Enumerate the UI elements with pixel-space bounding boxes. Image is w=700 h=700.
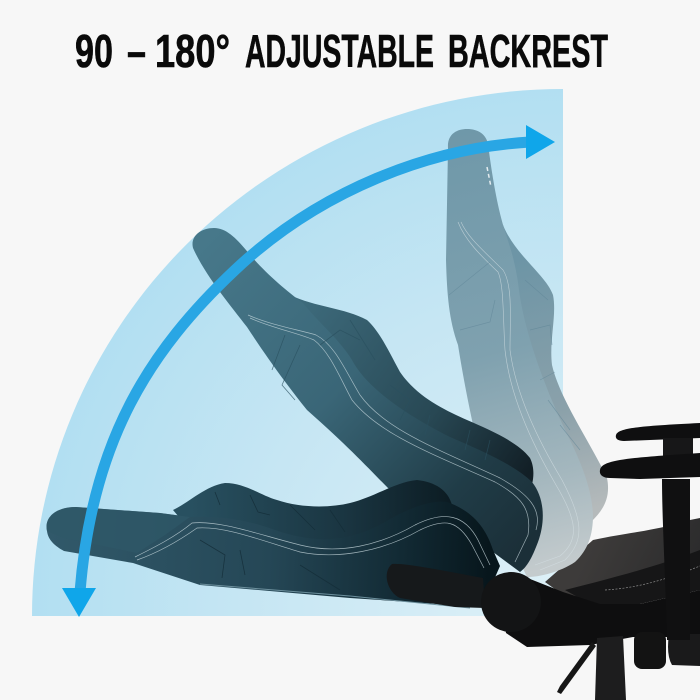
mid backrest panel lines <box>272 320 490 460</box>
lower wheel housing <box>634 632 666 669</box>
flat backrest side wing <box>173 480 452 555</box>
flat backrest main panel <box>47 502 500 607</box>
rear armrest pad <box>616 423 700 441</box>
upright backrest main panel <box>446 129 593 577</box>
flat backrest lower edge <box>200 584 470 608</box>
mechanism plate <box>500 577 700 647</box>
title <box>75 25 608 77</box>
title: – <box>127 25 146 77</box>
lever <box>557 642 596 694</box>
rotation arrow <box>62 125 555 617</box>
flat backrest head plate <box>47 507 190 553</box>
backrest: 90 degrees upright (lightest) <box>446 129 608 577</box>
armrest column base <box>668 634 700 666</box>
upright backrest side wing <box>503 225 608 521</box>
upright backrest logo <box>487 167 491 187</box>
flat backrest stitching <box>135 517 490 568</box>
recline mechanism <box>387 564 700 647</box>
arrow arc <box>80 142 530 592</box>
front armrest pad <box>600 453 700 479</box>
mid backrest stitching <box>248 315 538 562</box>
backrest: 180 degrees flat (darkest) <box>47 480 500 608</box>
arrowhead: upper end <box>526 125 555 159</box>
quarter-circle range sector <box>32 89 563 616</box>
title: 180° <box>155 25 230 77</box>
flat backrest panel lines <box>200 492 392 590</box>
hinge disc <box>481 572 541 632</box>
rear armrest post <box>663 438 693 458</box>
title: 90 <box>75 25 113 77</box>
front armrest column <box>662 479 690 640</box>
arrowhead: lower end <box>62 588 96 617</box>
gas lift column <box>595 636 626 700</box>
mid backrest main panel <box>193 228 543 572</box>
gas lift and lever <box>557 632 700 700</box>
armrests <box>600 423 700 640</box>
upright backrest panel lines <box>449 262 580 450</box>
backrest: mid recline <box>193 228 543 572</box>
chair seat <box>545 518 700 604</box>
hinge bar <box>387 564 485 608</box>
title: ADJUSTABLE <box>245 25 434 77</box>
upright backrest stitching <box>458 222 579 570</box>
title: BACKREST <box>448 25 608 77</box>
mid backrest side wing <box>290 295 533 492</box>
